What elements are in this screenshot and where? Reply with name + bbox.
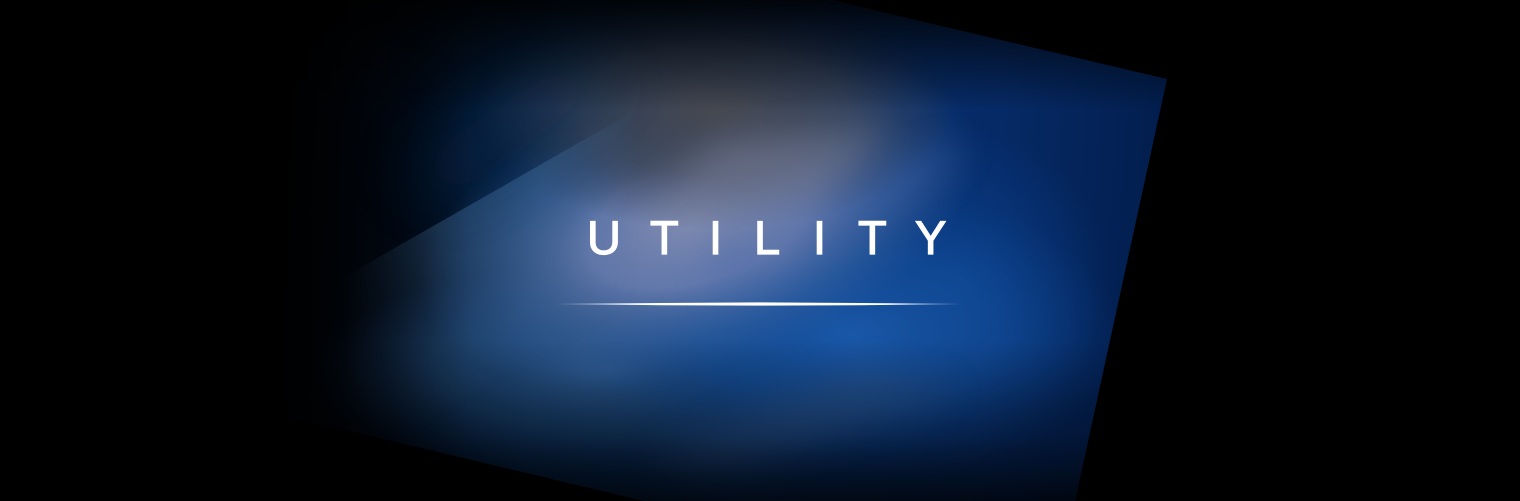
angled light panel — [326, 0, 1167, 501]
diagonal streaks — [364, 99, 940, 456]
title: UTILITY — [587, 211, 946, 264]
underline rule — [555, 302, 962, 306]
utility banner — [326, 0, 1167, 501]
